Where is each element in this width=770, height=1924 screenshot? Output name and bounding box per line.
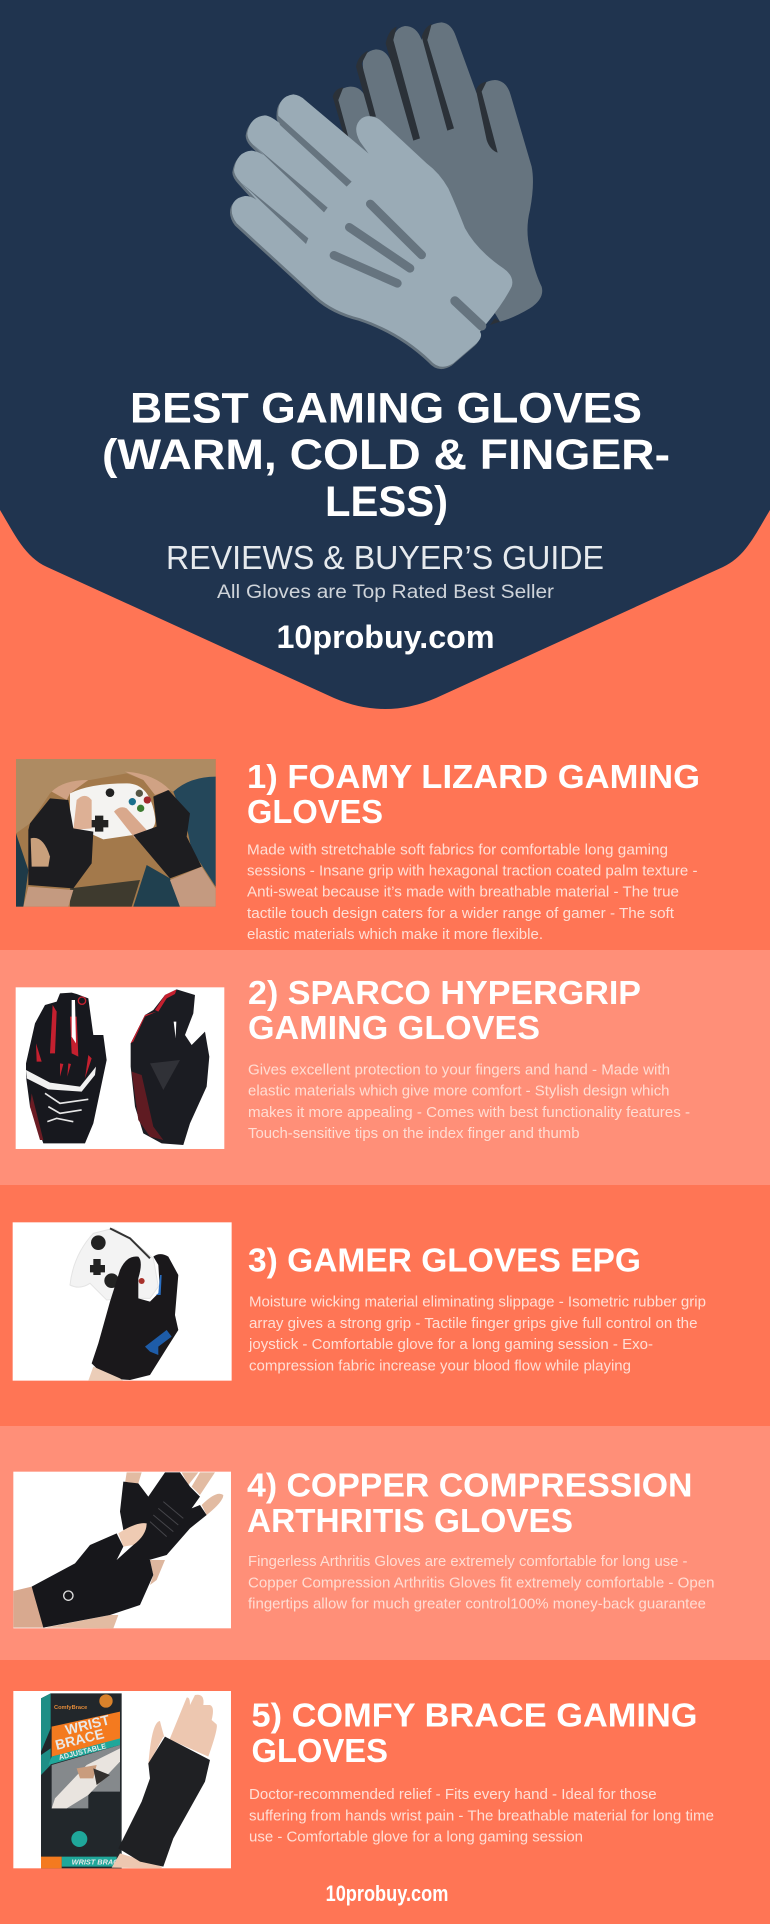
heading [247, 1468, 692, 1540]
description [248, 1553, 714, 1613]
heading: GLOVES [252, 1733, 388, 1770]
description: Anti-sweat because it’s made with breathable material - The true [247, 884, 679, 901]
heading: 5) COMFY BRACE GAMING [252, 1698, 698, 1735]
photo: fingerless arthritis gloves [13, 1472, 231, 1628]
description: elastic materials which make it more flexible. [247, 926, 543, 943]
description: use - Comfortable glove for a long gaming session [249, 1829, 583, 1846]
description: Touch-sensitive tips on the index finger and thumb [248, 1125, 580, 1142]
photo: red and black gloves [16, 987, 224, 1149]
photo: wrist brace and box: WRIST BRACE [72, 1857, 124, 1866]
panel: product 1 [0, 730, 770, 950]
description: sessions - Insane grip with hexagonal traction coated palm texture - [247, 863, 698, 880]
photo: wrist brace and box: ADJUSTABLE [58, 1741, 107, 1762]
description [249, 1786, 714, 1846]
description: makes it more appealing - Comes with best functionality features - [248, 1104, 690, 1121]
description [247, 841, 698, 943]
description: Moisture wicking material eliminating slippage - Isometric rubber grip [249, 1294, 706, 1311]
description: suffering from hands wrist pain - The breathable material for long time [249, 1807, 714, 1824]
panel: product 3 [0, 1185, 770, 1426]
description: compression fabric increase your blood flow while playing [249, 1357, 631, 1374]
header banner [0, 0, 770, 709]
description: tactile touch design caters for a wider range of gamer - The soft [247, 905, 675, 922]
heading: 1) FOAMY LIZARD GAMING [247, 759, 700, 796]
description: Fingerless Arthritis Gloves are extremely comfortable for long use - [248, 1553, 688, 1570]
subtitle: REVIEWS & BUYER’S GUIDE [166, 539, 604, 576]
panel: product 4 [0, 1426, 770, 1660]
tagline: All Gloves are Top Rated Best Seller [217, 582, 555, 603]
photo: glove holding controller [13, 1222, 232, 1381]
description: Gives excellent protection to your fingers and hand - Made with [248, 1061, 670, 1078]
description: Made with stretchable soft fabrics for comfortable long gaming [247, 841, 668, 858]
heading [247, 759, 700, 831]
heading: 4) COPPER COMPRESSION [247, 1468, 692, 1505]
description: elastic materials which give more comfort - Stylish design which [248, 1083, 670, 1100]
heading [252, 1698, 698, 1770]
photo: wrist brace and box: BRACE [54, 1725, 106, 1753]
heading: ARTHRITIS GLOVES [247, 1503, 573, 1540]
website: 10probuy.com [276, 619, 494, 655]
description [248, 1294, 706, 1374]
description [248, 1061, 690, 1142]
photo: hands on controller [16, 759, 216, 907]
heading: 2) SPARCO HYPERGRIP [248, 975, 641, 1012]
description: joystick - Comfortable glove for a long gaming session - Exo- [248, 1336, 653, 1353]
title: LESS) [325, 478, 448, 526]
description: array gives a strong grip - Tactile finger grips give full control on the [249, 1315, 698, 1332]
photo: wrist brace and box: ComfyBrace [54, 1705, 87, 1711]
heading: GAMING GLOVES [248, 1010, 540, 1047]
footer website: 10probuy.com [326, 1881, 448, 1906]
heading: 3) GAMER GLOVES EPG [248, 1243, 641, 1280]
heading: GLOVES [247, 794, 383, 831]
panel: product 2 [0, 950, 770, 1185]
heading [248, 975, 641, 1047]
title: BEST GAMING GLOVES [130, 384, 642, 432]
title: (WARM, COLD & FINGER- [102, 431, 670, 479]
panel: product 5 [0, 1660, 770, 1924]
photo: wrist brace and box [13, 1691, 231, 1868]
photo: wrist brace and box: WRIST [64, 1711, 112, 1738]
description: fingertips allow for much greater control100% money-back guarantee [248, 1596, 706, 1613]
description: Doctor-recommended relief - Fits every hand - Ideal for those [249, 1786, 657, 1803]
description: Copper Compression Arthritis Gloves fit extremely comfortable - Open [248, 1574, 714, 1591]
icon: pair of gloves [230, 22, 542, 369]
title [102, 384, 670, 526]
